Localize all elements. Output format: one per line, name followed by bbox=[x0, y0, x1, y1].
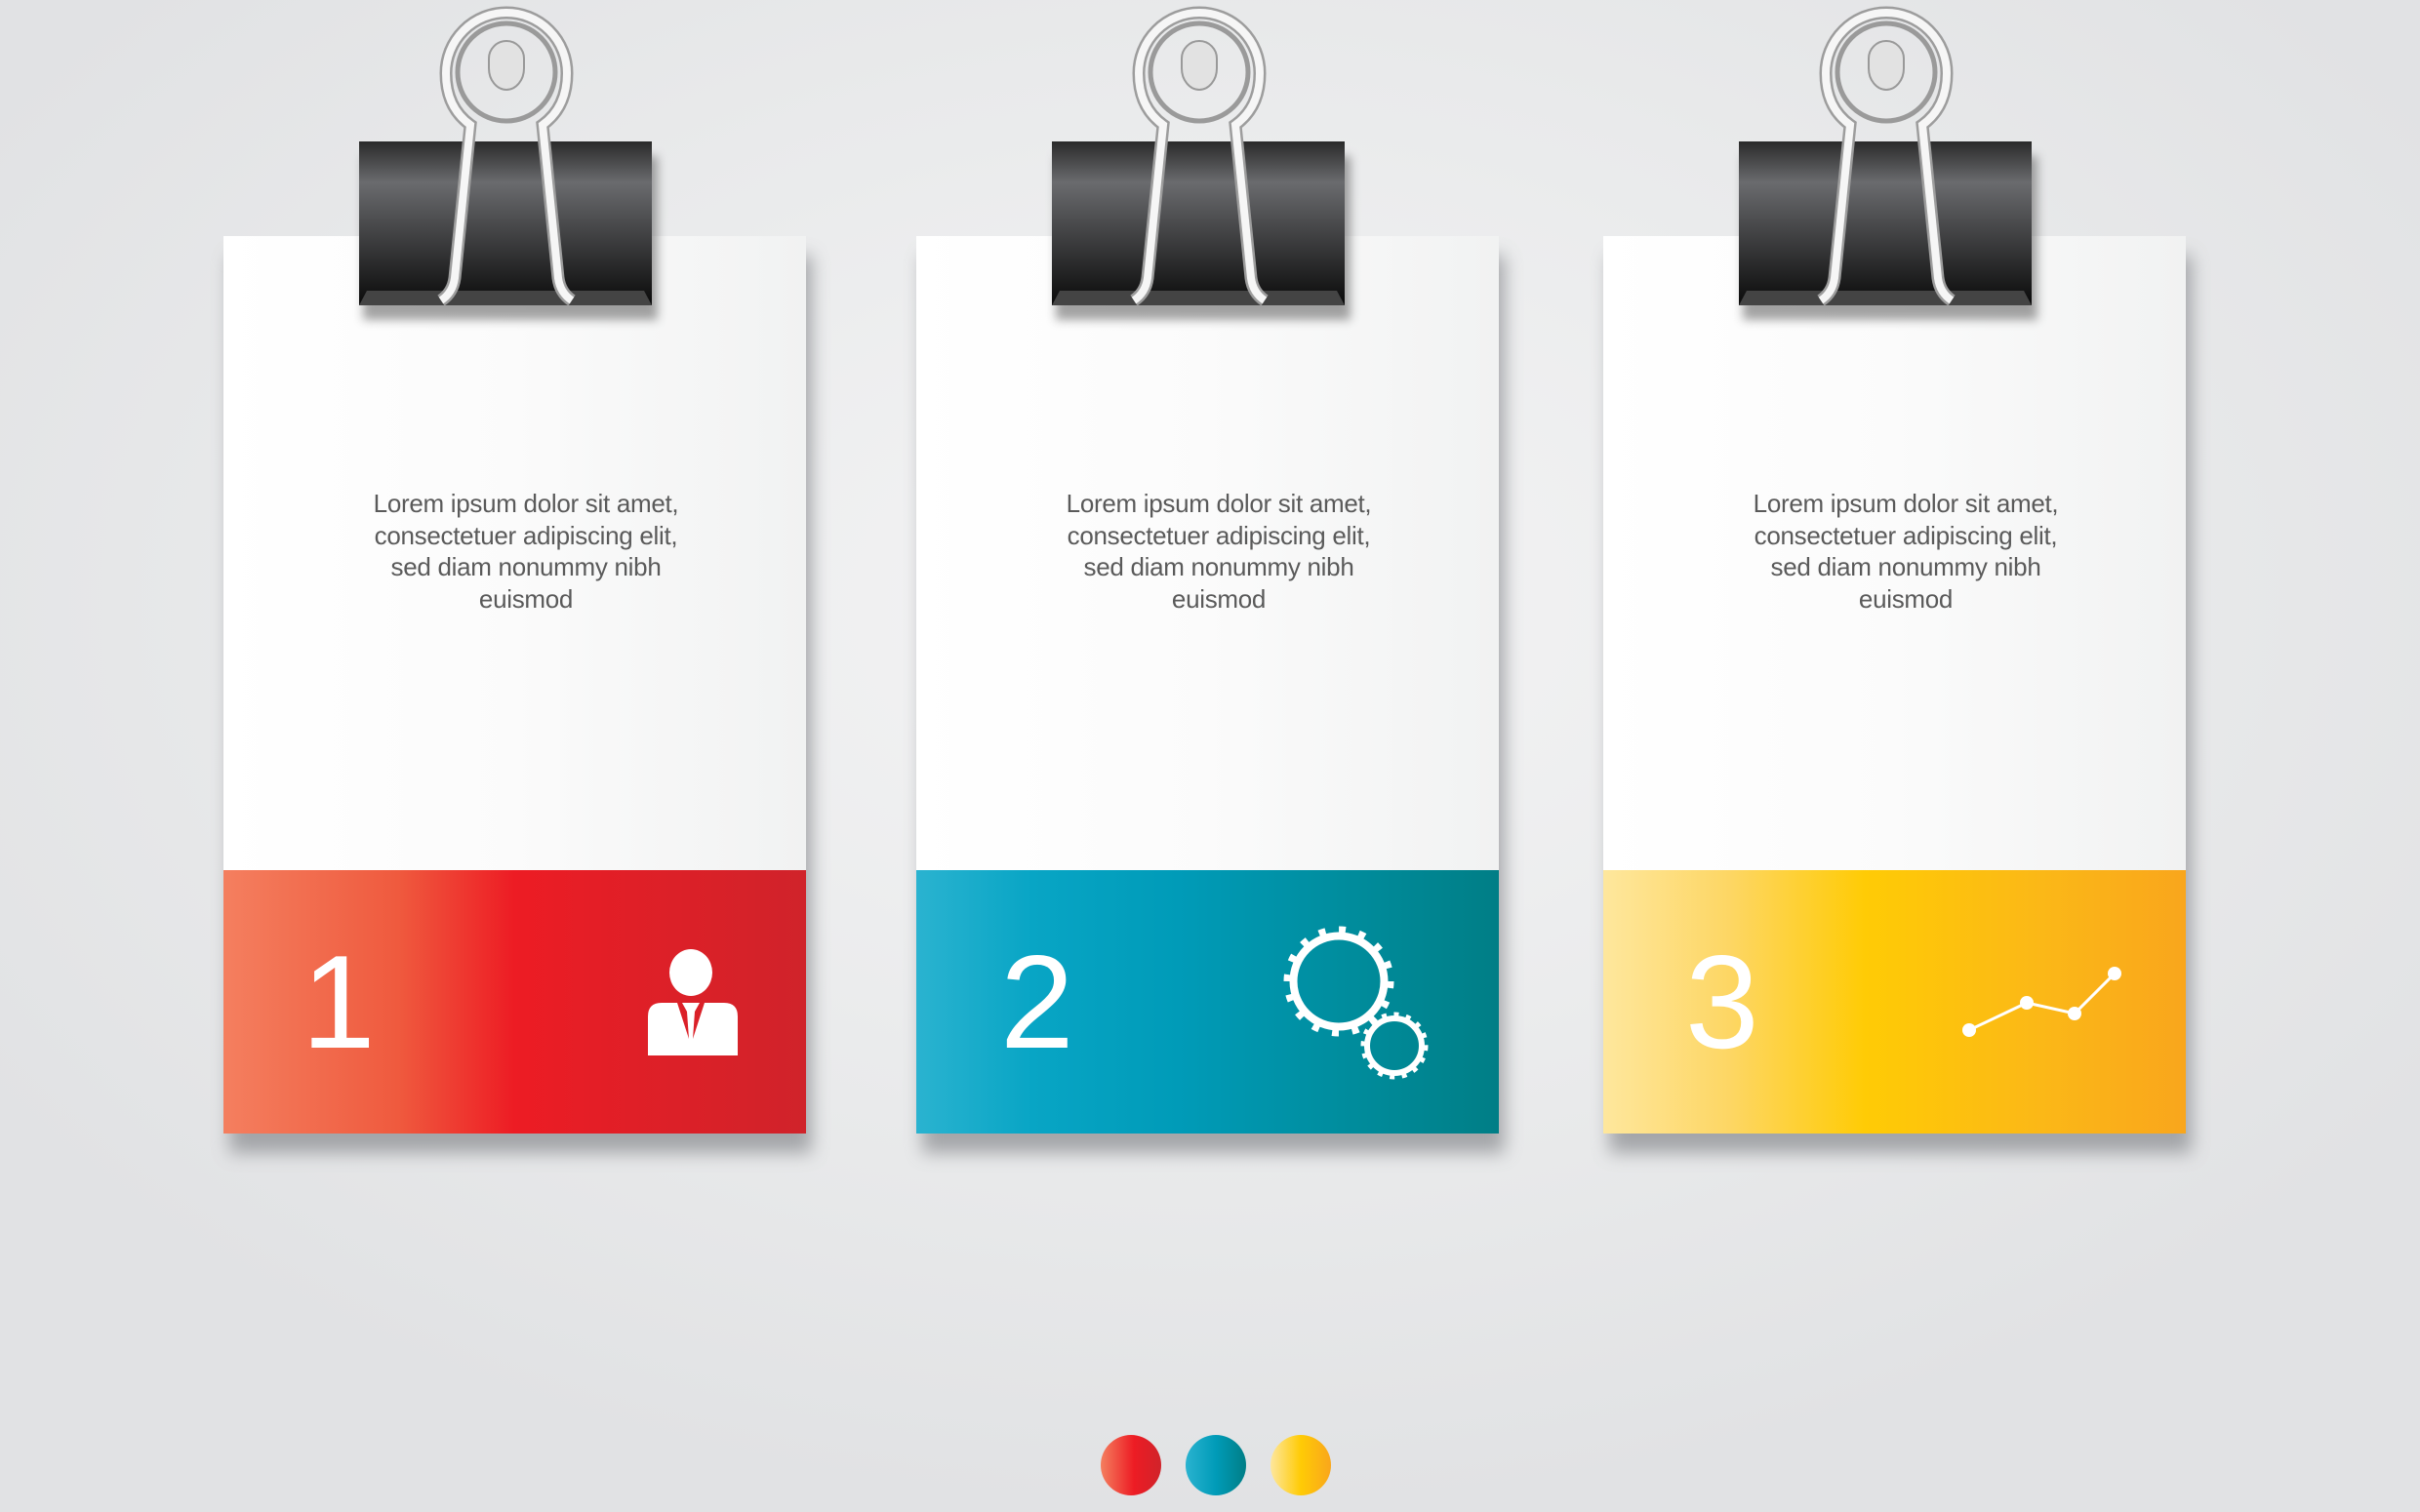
text block 2: consectetuer adipiscing elit, bbox=[1068, 521, 1370, 550]
text block 3: consectetuer adipiscing elit, bbox=[1754, 521, 2057, 550]
text block 3: Lorem ipsum dolor sit amet, bbox=[1754, 489, 2058, 518]
text block 1: sed diam nonummy nibh bbox=[391, 552, 661, 581]
text block 1: consectetuer adipiscing elit, bbox=[375, 521, 677, 550]
dot red bbox=[1101, 1435, 1161, 1495]
clip 2 bbox=[1050, 6, 1356, 326]
text block 3: euismod bbox=[1859, 583, 1953, 613]
text block 1: Lorem ipsum dolor sit amet, bbox=[374, 489, 678, 518]
dot yellow bbox=[1270, 1435, 1331, 1495]
paper 1 bbox=[223, 236, 806, 870]
band 2 bbox=[916, 870, 1499, 1134]
number 3: 3 bbox=[1685, 928, 1759, 1076]
icon: line chart bbox=[1962, 967, 2121, 1037]
text block 1 bbox=[374, 489, 678, 613]
icon: gears bbox=[1284, 927, 1429, 1079]
card 3 bbox=[1598, 236, 2201, 1163]
band 1 bbox=[223, 870, 806, 1134]
clip 3 bbox=[1737, 6, 2043, 326]
text block 2: euismod bbox=[1172, 583, 1266, 613]
number 1: 1 bbox=[302, 928, 376, 1076]
card 2 bbox=[911, 236, 1514, 1163]
text block 3: sed diam nonummy nibh bbox=[1771, 552, 2040, 581]
card 1 bbox=[219, 236, 822, 1163]
paper 2 bbox=[916, 236, 1499, 870]
text block 2: Lorem ipsum dolor sit amet, bbox=[1067, 489, 1371, 518]
dot teal bbox=[1186, 1435, 1246, 1495]
paper 3 bbox=[1603, 236, 2186, 870]
icon: person bbox=[648, 949, 738, 1055]
band 3 bbox=[1603, 870, 2186, 1134]
clip 1 bbox=[357, 6, 664, 326]
text block 2: sed diam nonummy nibh bbox=[1084, 552, 1353, 581]
number 2: 2 bbox=[1000, 928, 1074, 1076]
text block 3 bbox=[1754, 489, 2058, 613]
text block 1: euismod bbox=[479, 583, 573, 613]
text block 2 bbox=[1067, 489, 1371, 613]
